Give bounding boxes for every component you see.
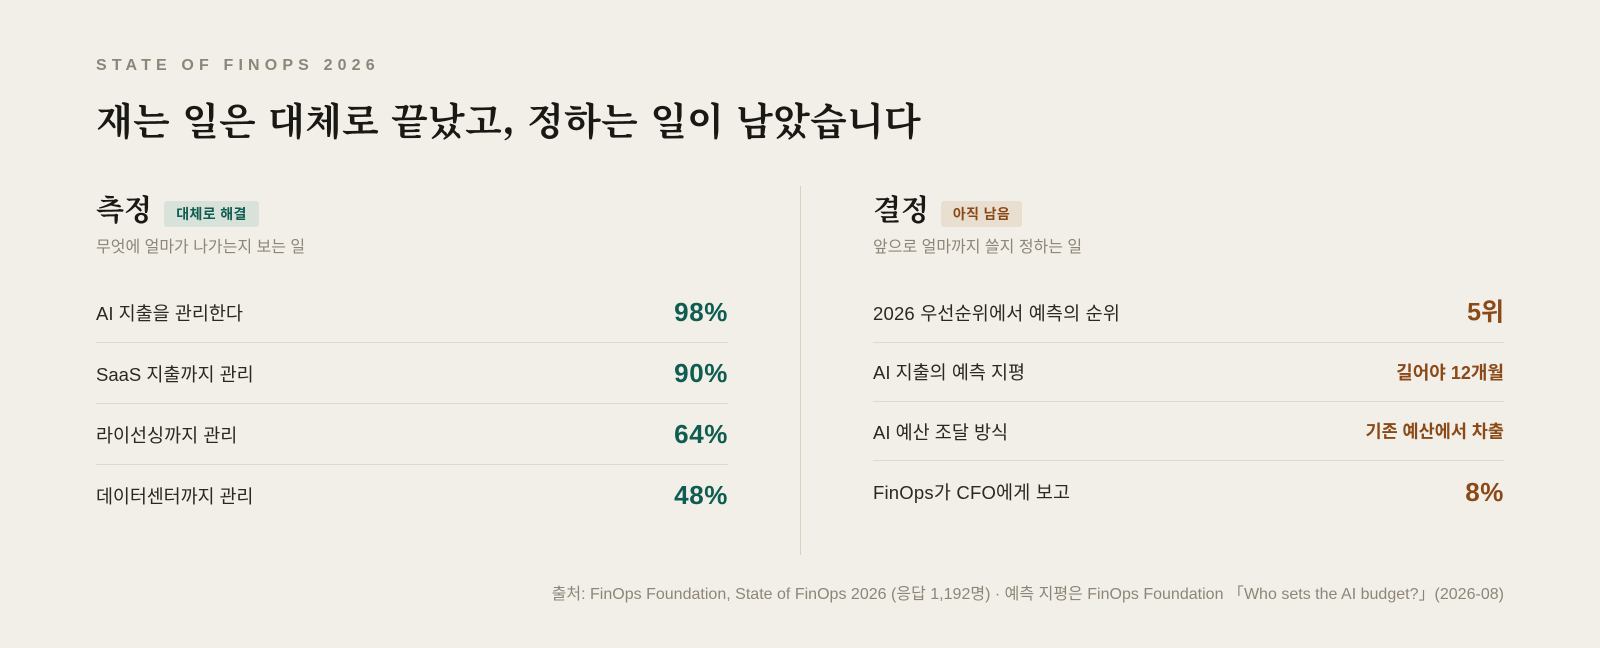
row: AI spend: 98% — [674, 297, 728, 327]
row: budget sourcing — [873, 421, 1504, 443]
row: data center — [96, 480, 728, 510]
badge: mostly solved — [164, 201, 259, 227]
row: budget sourcing: AI 예산 조달 방식 — [873, 422, 1008, 443]
row: reporting to CFO: 8% — [1465, 477, 1504, 507]
row: SaaS spend: 90% — [674, 358, 728, 388]
row: licensing: 라이선싱까지 관리 — [96, 425, 237, 446]
row: SaaS spend: SaaS 지출까지 관리 — [96, 364, 254, 385]
row: budget sourcing: 기존 예산에서 차출 — [1365, 421, 1504, 441]
row: forecast horizon: 길어야 12개월 — [1396, 363, 1504, 383]
heading: decision: 결정 — [873, 188, 929, 229]
subtitle: measurement: 무엇에 얼마가 나가는지 보는 일 — [96, 239, 305, 256]
row: AI spend: AI 지출을 관리한다 — [96, 303, 243, 324]
row: data center: 데이터센터까지 관리 — [96, 486, 253, 507]
row: forecast priority: 2026 우선순위에서 예측의 순위 — [873, 303, 1120, 324]
badge: still remaining — [941, 201, 1022, 227]
panel: decision — [873, 188, 1504, 507]
title: 재는 일은 대체로 끝났고, 정하는 일이 남았습니다 — [96, 91, 921, 146]
panel: measurement — [96, 188, 728, 510]
row: data center: 48% — [674, 480, 728, 510]
row: licensing: 64% — [674, 419, 728, 449]
heading: measurement: 측정 — [96, 188, 152, 229]
eyebrow: STATE OF FINOPS 2026 — [96, 57, 380, 74]
row: forecast horizon — [873, 362, 1504, 383]
row: forecast priority: 5위 — [1467, 298, 1504, 326]
row: licensing — [96, 419, 728, 449]
badge: still remaining: 아직 남음 — [953, 206, 1010, 222]
row: reporting to CFO: FinOps가 CFO에게 보고 — [873, 482, 1070, 503]
subtitle: decision: 앞으로 얼마까지 쓸지 정하는 일 — [873, 239, 1082, 256]
source note: 출처: FinOps Foundation, State of FinOps 2026 (응답 1,192명) · 예측 지평은 FinOps Foundation 「Who sets the AI budget?」(2026-08) — [552, 586, 1504, 603]
row: AI spend — [96, 297, 728, 327]
row: forecast priority — [873, 298, 1504, 326]
row: reporting to CFO — [873, 477, 1504, 507]
badge: mostly solved: 대체로 해결 — [176, 206, 247, 222]
row: SaaS spend — [96, 358, 728, 388]
row: forecast horizon: AI 지출의 예측 지평 — [873, 362, 1025, 383]
